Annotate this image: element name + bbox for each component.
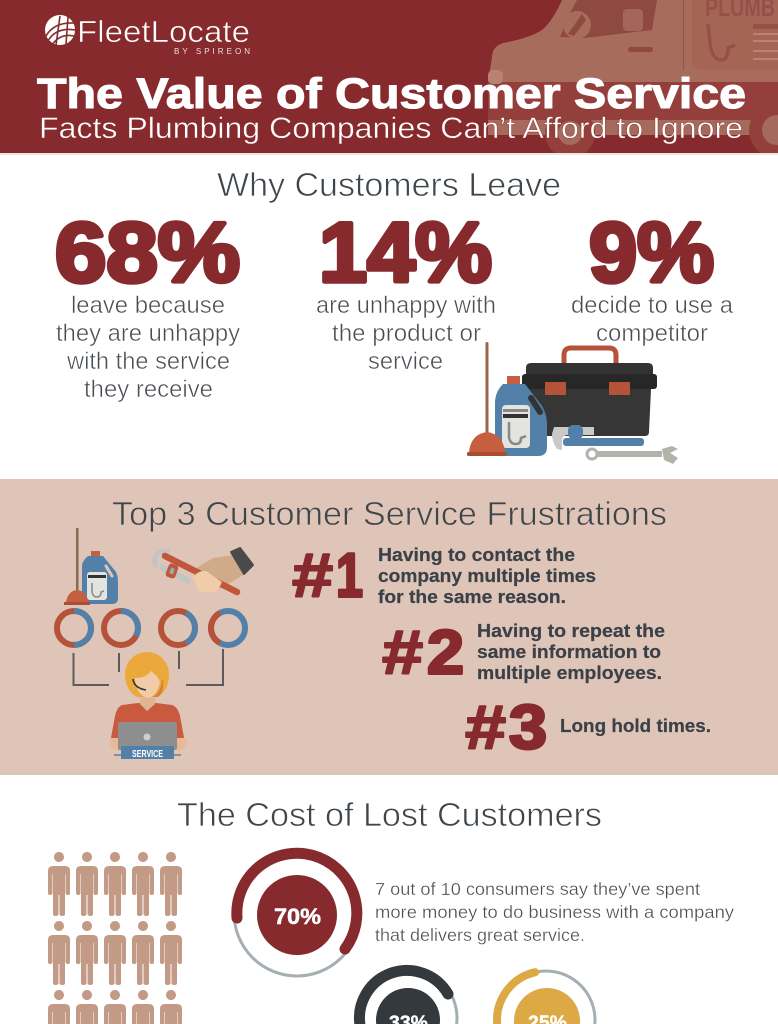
stat text: 68% bbox=[56, 292, 240, 403]
frustration #3: 3 bbox=[509, 694, 547, 762]
frustration #1 bbox=[291, 542, 596, 610]
pictogram: rows of people bbox=[48, 852, 182, 1024]
text: 70% description bbox=[375, 879, 734, 945]
chart: four donut rings bbox=[57, 611, 245, 645]
frustration #1: # bbox=[291, 542, 333, 610]
text: 70% description: more money to do business with a company bbox=[375, 902, 734, 922]
title: The Value of Customer Service bbox=[37, 70, 746, 118]
icon: customer service agent bbox=[110, 652, 186, 760]
stat: 14% bbox=[316, 206, 496, 375]
logo: FleetLocate by Spireon bbox=[45, 14, 250, 56]
chart: 70% ring bbox=[234, 850, 360, 976]
frustration #3: # bbox=[464, 694, 506, 762]
frustration #2: multiple employees. bbox=[477, 662, 662, 683]
heading: cost of lost customers: The Cost of Lost Customers bbox=[177, 796, 602, 833]
frustration #2: 2 bbox=[427, 618, 464, 688]
connector lines bbox=[74, 649, 223, 685]
stat text: 68%: with the service bbox=[66, 348, 230, 375]
chart: 33% ring bbox=[357, 968, 457, 1024]
heading: why customers leave: Why Customers Leave bbox=[217, 166, 561, 203]
stat text: 14%: service bbox=[368, 348, 443, 375]
stat text: 68%: they receive bbox=[84, 376, 213, 403]
frustration #2: Having to repeat the bbox=[477, 620, 665, 641]
frustration #1: for the same reason. bbox=[378, 586, 566, 607]
panel: frustrations bbox=[0, 479, 778, 775]
logo: FleetLocate by Spireon: FleetLocate bbox=[77, 14, 250, 49]
stat text: 9%: decide to use a bbox=[571, 292, 734, 319]
stat: 68%: 68% bbox=[55, 206, 240, 300]
icon: hand holding pipe wrench bbox=[155, 548, 253, 592]
frustration #3 bbox=[464, 694, 711, 762]
stat text: 68%: they are unhappy bbox=[56, 320, 240, 347]
frustration #1: 1 bbox=[336, 542, 363, 610]
text: 70% description: 7 out of 10 consumers say they’ve spent bbox=[375, 879, 700, 899]
truck illustration bbox=[488, 0, 778, 158]
stat text: 9%: competitor bbox=[596, 320, 708, 347]
icon: toolbox with plunger, jug and wrenches bbox=[467, 342, 678, 464]
heading: top 3 frustrations: Top 3 Customer Service Frustrations bbox=[112, 495, 667, 532]
icon: customer service agent: SERVICE bbox=[132, 748, 163, 760]
frustration #1: Having to contact the bbox=[378, 544, 575, 565]
panel: header bbox=[0, 0, 778, 159]
icon: plunger and jug bbox=[64, 528, 118, 605]
frustration #1: company multiple times bbox=[378, 565, 596, 586]
stat: 68% bbox=[55, 206, 240, 403]
frustration #2 bbox=[381, 618, 665, 688]
stat: 9% bbox=[571, 206, 734, 347]
chart: 70% ring: 70% bbox=[274, 904, 321, 929]
stat text: 14%: the product or bbox=[332, 320, 481, 347]
stat text: 14%: are unhappy with bbox=[316, 292, 496, 319]
stat text: 68%: leave because bbox=[71, 292, 225, 319]
stat: 9%: 9% bbox=[589, 206, 714, 300]
frustration #3: Long hold times. bbox=[560, 715, 711, 736]
text: 70% description: that delivers great service. bbox=[375, 925, 585, 945]
stat: 14%: 14% bbox=[319, 206, 492, 300]
stat text: 14% bbox=[316, 292, 496, 375]
chart: 25% ring bbox=[497, 971, 595, 1024]
frustration #2: # bbox=[381, 618, 423, 688]
frustration #2: same information to bbox=[477, 641, 661, 662]
logo: FleetLocate by Spireon: BY SPIREON bbox=[174, 47, 250, 56]
subtitle: Facts Plumbing Companies Can’t Afford to Ignore bbox=[39, 112, 743, 145]
stat text: 9% bbox=[571, 292, 734, 347]
